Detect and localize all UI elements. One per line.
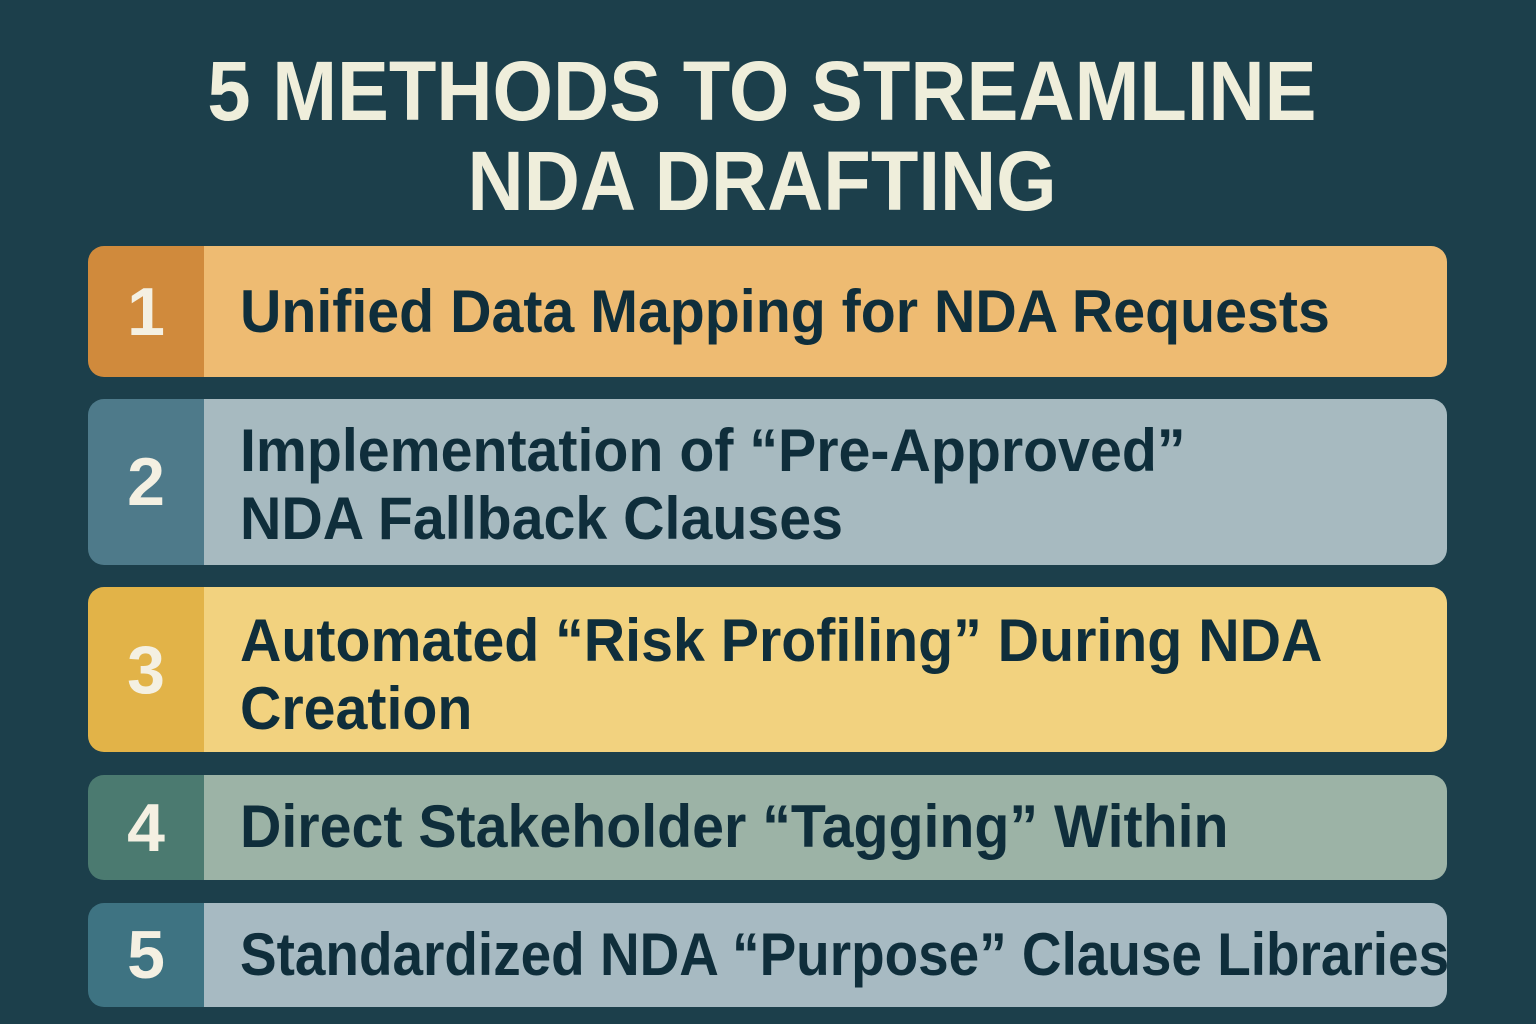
- number 2: 2: [127, 444, 165, 520]
- number 2: [88, 399, 204, 565]
- number 4: [88, 775, 204, 880]
- number 3: [88, 587, 204, 752]
- number 1: [88, 246, 204, 377]
- number 1: 1: [127, 274, 165, 350]
- text 3: Automated “Risk Profiling” During NDA: [240, 607, 1322, 674]
- text 2: [240, 417, 1186, 552]
- text 5: Standardized NDA “Purpose” Clause Libraries: [240, 921, 1449, 988]
- number 5: [88, 903, 204, 1007]
- text 1: Unified Data Mapping for NDA Requests: [240, 278, 1330, 345]
- item 1: [88, 246, 1447, 377]
- text 3: [240, 607, 1322, 742]
- item 4: [88, 775, 1447, 880]
- text 3: Creation: [240, 675, 472, 742]
- number 5: 5: [127, 917, 165, 993]
- number 3: 3: [127, 632, 165, 708]
- text 2: Implementation of “Pre-Approved”: [240, 417, 1186, 484]
- title: [207, 44, 1317, 228]
- item 5: [88, 903, 1449, 1007]
- title: NDA DRAFTING: [467, 134, 1057, 228]
- title: 5 METHODS TO STREAMLINE: [207, 44, 1317, 138]
- text 2: NDA Fallback Clauses: [240, 485, 843, 552]
- number 4: 4: [127, 790, 165, 866]
- item 3: [88, 587, 1447, 752]
- text 4: Direct Stakeholder “Tagging” Within: [240, 793, 1229, 860]
- item 2: [88, 399, 1447, 565]
